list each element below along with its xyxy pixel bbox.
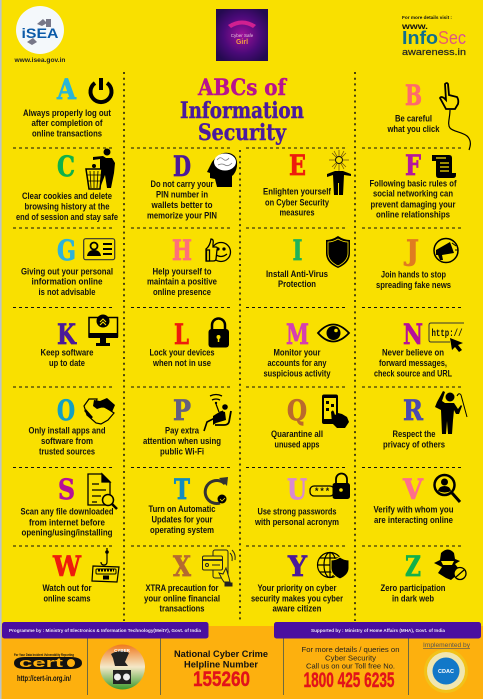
panel: I [266, 234, 350, 289]
panel: A: online transactions [32, 128, 102, 138]
logo: purple poster [216, 9, 268, 61]
panel: P [143, 394, 231, 457]
panel: W: Watch out for [42, 582, 92, 593]
icon: hooded hacker with block sign [434, 550, 466, 580]
panel: B: what you click [387, 123, 440, 134]
icon: phone with tapping hand [322, 394, 349, 428]
logo: purple poster: Girl [236, 39, 248, 46]
toll free contact: Call us on our Toll free No. [306, 664, 395, 670]
panel: W [42, 548, 119, 603]
panel: X: your online financial [144, 592, 220, 603]
logo: CERT-In [14, 653, 82, 683]
icon: enlightened person [327, 150, 351, 195]
panel: G: Giving out your personal [21, 265, 113, 276]
panel: L: L [174, 318, 189, 351]
panel: Y [251, 550, 349, 614]
panel: Y: Y [287, 550, 308, 583]
panel: D [147, 150, 237, 220]
panel: E: on Cyber Security [265, 196, 330, 207]
panel: X [144, 550, 235, 614]
panel: M: suspicious activity [264, 367, 331, 378]
logo: InfoSec awareness: Info [402, 28, 438, 48]
icon: man bowing with cane [435, 391, 467, 434]
panel: F: Following basic rules of [370, 177, 457, 188]
banner: supported by: Supported by : Ministry of Home Affairs (MHA), Govt. of India [311, 628, 445, 634]
panel: K [40, 314, 118, 368]
panel: R: Respect the [392, 428, 436, 439]
logo: ISEA: iSEA [22, 25, 58, 41]
panel: F [370, 149, 457, 220]
panel: U: Use strong passwords [258, 506, 336, 517]
panel: Z: Z [405, 550, 421, 583]
panel: Z: in dark web [392, 592, 434, 603]
panel: M [264, 318, 349, 378]
panel: O [28, 394, 115, 457]
panel: C [16, 148, 118, 222]
panel: Q: Q [287, 394, 307, 427]
panel: B: Be careful [395, 112, 432, 124]
helpline: Helpline Number [184, 660, 259, 670]
toll free contact: For more details / queries on [302, 647, 400, 654]
title: ABCs of [197, 75, 287, 101]
panel: O: trusted sources [39, 446, 95, 457]
panel: J: J [403, 234, 419, 267]
icon: globe and shield [318, 552, 349, 579]
footer band [2, 626, 483, 699]
panel: U: U [287, 473, 307, 506]
icon: handshake [84, 398, 115, 424]
panel: X: transactions [160, 603, 204, 614]
panel: L: Lock your devices [150, 347, 214, 358]
panel: N: Never believe on [382, 347, 444, 358]
panel: A: A [56, 73, 77, 106]
panel: N: N [403, 318, 423, 351]
panel: C: browsing history at the [24, 201, 110, 212]
panel: J [376, 234, 458, 290]
icon: ID card [84, 239, 115, 260]
panel: W: W [52, 550, 81, 583]
logo: purple poster: Cyber Safe [231, 33, 254, 38]
panel: S: opening/using/installing [22, 527, 113, 538]
icon: update refresh [205, 477, 228, 504]
panel: U [254, 473, 350, 527]
banner: supported by [274, 622, 481, 638]
logo: implemented by C-DAC [423, 642, 471, 693]
logo: CERT-In: For Your Data Incident Vulnerability Reporting [14, 653, 74, 657]
panel: P: attention when using [143, 435, 221, 446]
icon: card and phone payment [202, 550, 235, 586]
title: Security [198, 120, 287, 146]
icon: document with magnifier [88, 474, 117, 509]
panel: K: Keep software [40, 347, 94, 358]
panel: I: Protection [278, 278, 316, 289]
panel: O: Only install apps and [28, 425, 106, 436]
panel: T [148, 473, 228, 535]
panel: Y: security makes you cyber [251, 592, 343, 603]
panel: I: I [292, 234, 302, 267]
logo: InfoSec awareness: For more details visit : [402, 15, 452, 21]
panel: N [374, 318, 464, 378]
panel: R: privacy of others [383, 438, 445, 449]
panel: D: D [173, 150, 191, 183]
panel: O: O [57, 394, 75, 427]
panel: O: software from [41, 435, 93, 446]
panel: P: public Wi-Fi [160, 446, 204, 457]
panel: T: operating system [150, 524, 214, 535]
panel: L [150, 318, 229, 368]
panel: J: Join hands to stop [381, 269, 446, 280]
panel: R [383, 391, 467, 449]
icon: pointing hand with cable [440, 83, 470, 150]
panel: N: check source and URL [374, 367, 452, 378]
panel: T: Updates for your [152, 514, 213, 525]
panel: V: Verify with whom you [374, 504, 454, 515]
panel: A: Always properly log out [23, 107, 111, 118]
icon: megaphone in circle [434, 238, 458, 262]
title [180, 75, 304, 146]
panel: V [374, 473, 460, 525]
panel: G: G [57, 234, 76, 267]
panel: W: online scams [44, 592, 90, 603]
logo: InfoSec awareness [401, 15, 466, 58]
panel: H: maintain a positive [147, 276, 217, 287]
icon: power button [90, 78, 112, 102]
panel: F: online relationships [376, 209, 450, 220]
panel: C: C [57, 150, 75, 183]
icon: person on chair using Wi-Fi [204, 394, 231, 431]
panel: Y: Your priority on cyber [258, 582, 337, 593]
panel: D: memorize your PIN [147, 209, 217, 220]
panel: Z [380, 550, 466, 603]
icon: password bar and padlock: *** [314, 487, 330, 497]
panel: B [387, 79, 470, 150]
logo: implemented by C-DAC: Implemented by [423, 642, 471, 649]
panel: G [21, 234, 115, 297]
panel: H: H [172, 234, 192, 267]
panel: F: prevent damaging your [370, 198, 456, 209]
toll free contact: Cyber Security [325, 656, 377, 662]
panel: T: Turn on Automatic [148, 503, 216, 514]
panel: Z: Zero participation [380, 582, 446, 593]
panel: V: V [402, 473, 424, 506]
panel: E [263, 149, 351, 218]
panel: H: online presence [153, 286, 211, 297]
panel: S: S [58, 473, 75, 506]
panel: H [147, 234, 230, 297]
logo: CERT-In: cert [19, 655, 64, 670]
panel: G: is not advisable [38, 286, 96, 297]
panel: P: Pay extra [165, 425, 200, 436]
icon: shield [326, 236, 350, 268]
panel: Q: unused apps [274, 438, 320, 449]
panel: Q [271, 394, 349, 449]
logo: Cyber Dost: CYBER [114, 648, 131, 653]
logo: Cyber Dost [100, 644, 145, 690]
helpline: 155260 [193, 668, 250, 691]
panel: F: F [405, 149, 421, 182]
panel: B: B [405, 79, 422, 112]
panel: V: are interacting online [374, 514, 453, 525]
logo: InfoSec awareness: awareness.in [402, 47, 466, 58]
panel: E: measures [280, 207, 314, 218]
panel: F: social networking can [373, 188, 453, 199]
helpline [174, 649, 268, 691]
panel: E: Enlighten yourself [263, 186, 332, 197]
panel: K: K [57, 318, 77, 351]
icon: phishing hook on password [92, 548, 119, 582]
logo: InfoSec awareness: Sec [438, 28, 466, 48]
panel: S: from internet before [29, 516, 105, 527]
banner: programme by [2, 622, 208, 638]
icon: thumbs up and smiley [206, 239, 230, 262]
panel: X: X [173, 550, 191, 583]
icon: http address and cursor: http:// [432, 328, 462, 340]
panel: S [20, 473, 117, 538]
toll free contact: 1800 425 6235 [304, 669, 395, 692]
panel: J: spreading fake news [376, 279, 451, 290]
panel: N: forward messages, [379, 357, 447, 368]
panel: I: Install Anti-Virus [266, 268, 328, 279]
icon: padlock [208, 318, 229, 348]
logo: InfoSec awareness: www. [401, 21, 428, 31]
icon: rules scroll [432, 155, 456, 178]
panel: D: wallets better to [151, 199, 213, 210]
panel: U: with personal acronym [254, 516, 339, 527]
banner: programme by: Programme by : Ministry of Electronics & Information Technology(MeitY), Govt. of India [9, 628, 201, 634]
panel: T: T [174, 473, 190, 506]
icon: monitor with update arrows [88, 314, 118, 346]
panel: R: R [403, 394, 424, 427]
panel: M: M [286, 318, 309, 351]
logo: implemented by C-DAC: CDAC [438, 669, 454, 675]
panel: D: Do not carry your [150, 178, 214, 189]
title: Information [180, 98, 304, 124]
icon: eye [318, 324, 349, 342]
helpline: National Cyber Crime [174, 649, 268, 659]
panel: H: Help yourself to [152, 265, 212, 276]
panel: M: Monitor your [274, 347, 321, 358]
logo: CERT-In: http://cert-in.org.in/ [17, 674, 72, 683]
panel: C: end of session and stay safe [16, 211, 118, 222]
panel: P: P [173, 394, 191, 427]
panel: A [23, 73, 112, 138]
panel: Q: Quarantine all [271, 428, 323, 439]
panel: E: E [289, 149, 306, 182]
panel: A: after completion of [32, 117, 103, 128]
logo: ISEA: www.isea.gov.in [14, 57, 65, 64]
toll free contact [302, 647, 400, 692]
panel: M: accounts for any [268, 357, 327, 368]
icon: head with brain [207, 153, 237, 187]
icon: person using trash bin [86, 148, 115, 189]
icon: magnifier with person [434, 475, 460, 502]
panel: D: PIN number in [156, 188, 208, 199]
panel: K: up to date [49, 357, 85, 368]
panel: C: Clear cookies and delete [22, 190, 112, 201]
panel: L: when not in use [152, 357, 211, 368]
panel: Y: aware citizen [272, 603, 322, 614]
logo: ISEA [14, 6, 65, 64]
panel: S: Scan any file downloaded [20, 506, 114, 517]
panel: G: information online [32, 276, 102, 287]
panel: X: XTRA precaution for [146, 582, 219, 593]
